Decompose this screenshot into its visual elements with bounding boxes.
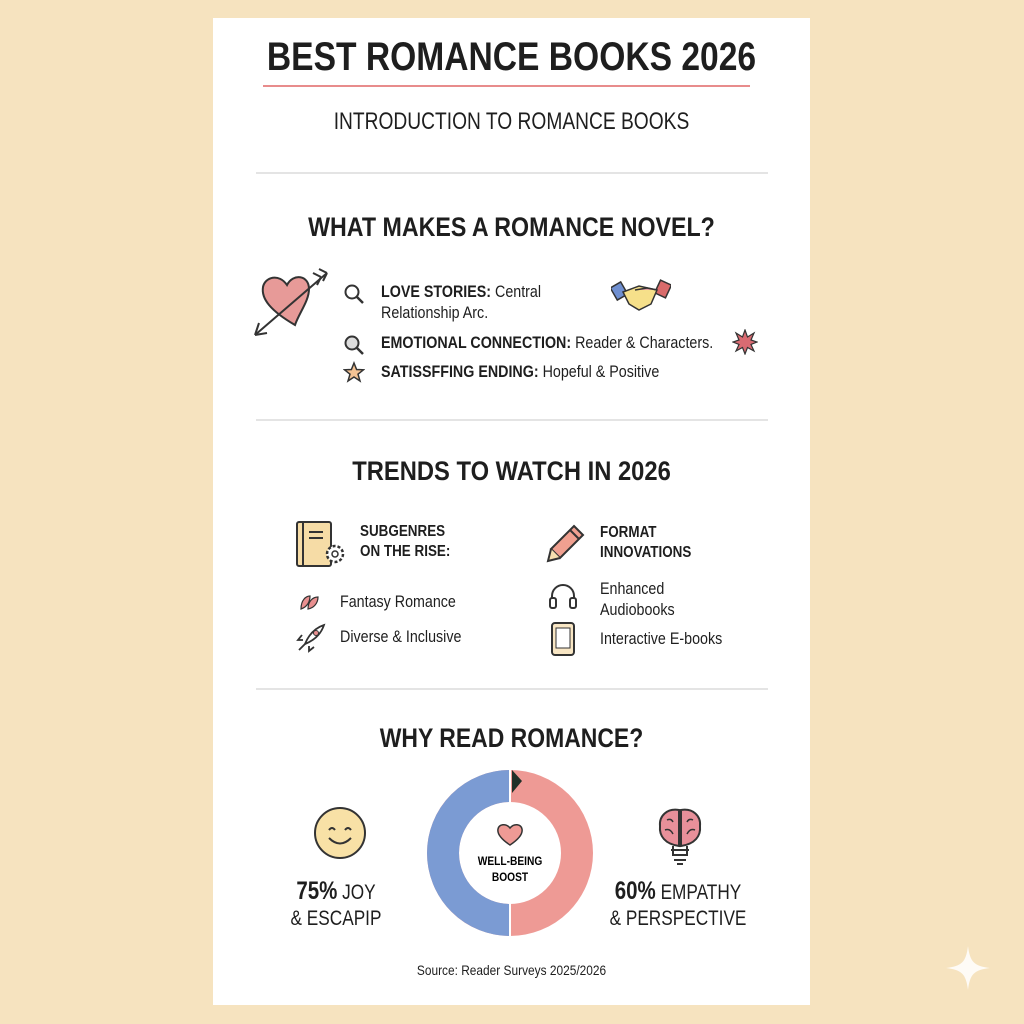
text: empathy: 60% EMPATHY: [615, 877, 741, 905]
icon: rocket: [296, 624, 326, 653]
icon: smiley: [314, 807, 366, 859]
item: emotional: EMOTIONAL CONNECTION: Reader & Characters.: [381, 333, 713, 352]
text: empathy: & PERSPECTIVE: [610, 907, 746, 930]
item: fantasy: Fantasy Romance: [340, 592, 456, 611]
icon: pen: [546, 524, 584, 562]
stat: empathy: [610, 808, 746, 930]
subtitle: INTRODUCTION TO ROMANCE BOOKS: [334, 108, 689, 135]
icon: handshake: [611, 279, 671, 311]
item: audiobooks: Audiobooks: [600, 600, 675, 619]
icon: brain bulb: [658, 808, 702, 865]
heading: what makes: WHAT MAKES A ROMANCE NOVEL?: [308, 212, 715, 242]
text: format: FORMAT: [600, 524, 656, 541]
icon: sparkle: [946, 946, 990, 990]
donut chart: BOOST: [492, 871, 528, 884]
item: love stories: LOVE STORIES: Central: [381, 282, 541, 301]
item: audiobooks: Enhanced: [600, 579, 664, 598]
item: love stories: [381, 282, 541, 322]
icon: heart: [498, 825, 522, 845]
card: [213, 18, 810, 1005]
text: subgenres: [360, 523, 450, 560]
source: Source: Reader Surveys 2025/2026: [417, 962, 606, 978]
icon: tablet: [551, 622, 575, 656]
text: empathy: [610, 877, 746, 930]
icon: headphones: [549, 584, 577, 609]
text: subgenres: ON THE RISE:: [360, 543, 450, 560]
icon: star: [343, 361, 365, 383]
icon: magnifier: [344, 336, 364, 355]
icon: leaf: [300, 595, 319, 610]
donut chart: WELL-BEING: [478, 855, 542, 868]
list: romance elements: [343, 282, 713, 383]
text: joy: 75% JOY: [296, 877, 376, 905]
panel: format: [546, 524, 722, 656]
title: BEST ROMANCE BOOKS 2026: [267, 35, 756, 79]
text: joy: & ESCAPIP: [291, 907, 381, 930]
item: ending: SATISSFFING ENDING: Hopeful & Positive: [381, 362, 659, 381]
item: e-books: Interactive E-books: [600, 629, 722, 648]
text: joy: [291, 877, 381, 930]
item: diverse: Diverse & Inclusive: [340, 627, 461, 646]
item: love stories: Relationship Arc.: [381, 303, 488, 322]
icon: heart with arrow: [254, 268, 328, 336]
heading: trends: TRENDS TO WATCH IN 2026: [352, 456, 671, 486]
heading: why read: WHY READ ROMANCE?: [380, 723, 643, 753]
text: format: [600, 524, 691, 561]
icon: burst: [732, 329, 758, 355]
donut chart: [427, 770, 593, 936]
icon: book gear: [296, 521, 344, 567]
stat: joy: [291, 807, 381, 930]
text: format: INNOVATIONS: [600, 544, 691, 561]
icon: magnifier: [344, 284, 364, 304]
panel: subgenres: [296, 521, 461, 653]
text: subgenres: SUBGENRES: [360, 523, 445, 540]
item: audiobooks: [600, 579, 675, 619]
